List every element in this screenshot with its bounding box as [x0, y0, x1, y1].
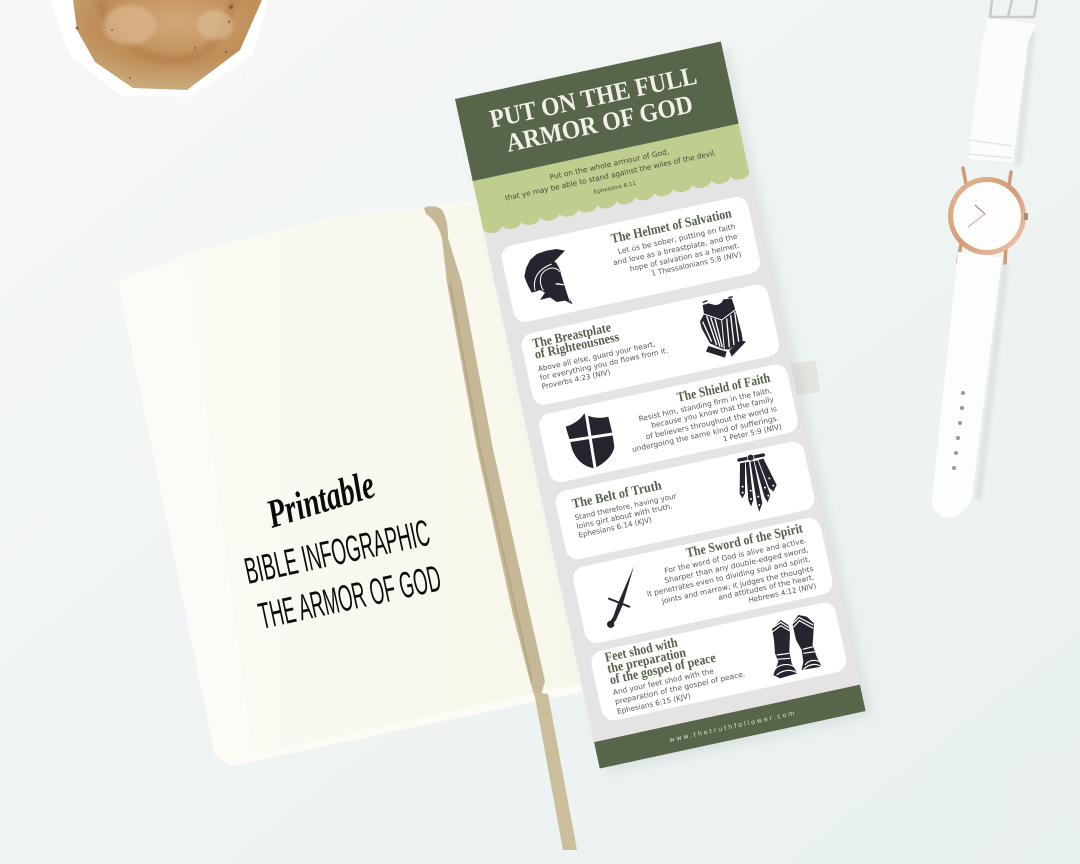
- coffee cup: [50, 0, 268, 120]
- title: PUT ON THE FULL: [487, 61, 699, 134]
- heading: of the gospel of peace: [608, 650, 717, 687]
- body text: Sharper than any double-edged sword,: [664, 545, 809, 585]
- title: [487, 61, 705, 160]
- watch shadow: [978, 30, 1032, 500]
- scalloped verse band: [472, 120, 750, 235]
- panel: sword: [571, 516, 835, 645]
- heading: [603, 627, 717, 687]
- watch hands: [975, 205, 985, 214]
- body text: because you know that the family: [650, 394, 775, 430]
- icon: sword: [607, 566, 634, 628]
- panel: belt: [554, 439, 817, 562]
- upper strap: [968, 18, 1036, 162]
- script word: Printable: [261, 461, 380, 537]
- watch: [932, 0, 1037, 518]
- page stack shading: [172, 254, 252, 752]
- heading: the preparation: [606, 644, 688, 676]
- heading: Feet shod with: [603, 634, 679, 665]
- card shadow: [462, 46, 873, 773]
- book cover and page edge: [118, 185, 620, 766]
- icon: shield: [563, 410, 617, 472]
- body text: of believers throughout the world is: [645, 404, 778, 441]
- infographic card: [455, 42, 866, 769]
- watch buckle: [990, 0, 1037, 17]
- header band: [455, 42, 739, 181]
- body text: for everything you do flows from it.: [539, 346, 669, 382]
- body text: Resist him, standing firm in the faith,: [638, 386, 773, 423]
- icon: belt: [739, 454, 777, 512]
- strap holes: [952, 391, 965, 470]
- body text: [642, 536, 818, 625]
- body text: [612, 660, 748, 716]
- left boot: [772, 620, 797, 678]
- panel: breastplate: [519, 282, 781, 407]
- body text: [610, 222, 743, 285]
- panel: feet: [589, 600, 849, 725]
- footer band: [594, 685, 866, 769]
- lower strap: [932, 252, 1002, 518]
- body text: Hebrews 4:12 (NIV): [748, 581, 817, 605]
- caption line 2: THE ARMOR OF GOD: [255, 558, 445, 637]
- body text: 1 Peter 5:9 (NIV): [722, 422, 783, 443]
- body text: joints and marrow; it judges the thoughts: [660, 564, 814, 606]
- lugs: [958, 168, 1011, 263]
- body text: Stand therefore, having your: [574, 491, 677, 522]
- notebook caption: [241, 461, 445, 637]
- body text: Ephesians 6:14 (KJV): [578, 515, 653, 540]
- icon: helmet: [524, 249, 573, 304]
- verse: that ye may be able to stand against the wiles of the devil.: [504, 148, 717, 203]
- body text: 1 Thessalonians 5:8 (NIV): [650, 250, 742, 278]
- left page: [174, 185, 620, 752]
- heading: of Righteousness: [533, 329, 620, 362]
- heading: The Shield of Faith: [675, 370, 772, 405]
- panel: shield: [537, 362, 800, 486]
- title: ARMOR OF GOD: [504, 89, 695, 158]
- body text: [625, 385, 783, 463]
- body text: it penetrates even to dividing soul and spirit,: [646, 554, 811, 599]
- body text: [537, 337, 671, 391]
- card background: [455, 42, 866, 769]
- body text: For the word of God is alive and active.: [664, 536, 807, 575]
- heading: The Belt of Truth: [571, 477, 663, 511]
- body text: And your feet shod with the: [612, 666, 715, 697]
- panel: helmet: [499, 195, 762, 324]
- icon: breastplate: [700, 297, 746, 358]
- body text: [574, 491, 681, 540]
- body text: hope of salvation as a helmet.: [629, 241, 740, 273]
- footer url: www.thetruthfollower.com: [668, 709, 795, 744]
- body text: Let us be sober, putting on faith: [617, 222, 736, 256]
- elastic band: [788, 360, 820, 396]
- verse: Put on the whole armour of God,: [549, 147, 670, 182]
- body text: undergoing the same kind of sufferings.: [631, 413, 780, 454]
- body text: Above all else, guard your heart,: [537, 339, 656, 373]
- body text: loins girt about with truth.: [576, 501, 673, 531]
- body text: preparation of the gospel of peace.: [614, 669, 746, 706]
- ribbon bookmark: [424, 206, 577, 850]
- open notebook: [118, 185, 820, 850]
- verse: Ephesians 6:11: [593, 181, 637, 196]
- body text: Proverbs 4:23 (NIV): [541, 367, 611, 391]
- body text: and love as a breastplate, and the: [612, 231, 739, 267]
- heading: The Helmet of Salvation: [609, 205, 733, 246]
- heading: The Breastplate: [531, 319, 612, 351]
- body text: and attitudes of the heart.: [717, 573, 815, 602]
- caption line 1: BIBLE INFOGRAPHIC: [241, 512, 433, 592]
- heading: The Sword of the Spirit: [685, 520, 804, 560]
- right boot: [792, 615, 822, 670]
- icon: sandals: [772, 615, 822, 678]
- body text: Ephesians 6:15 (KJV): [616, 691, 692, 716]
- watch case: [948, 177, 1026, 255]
